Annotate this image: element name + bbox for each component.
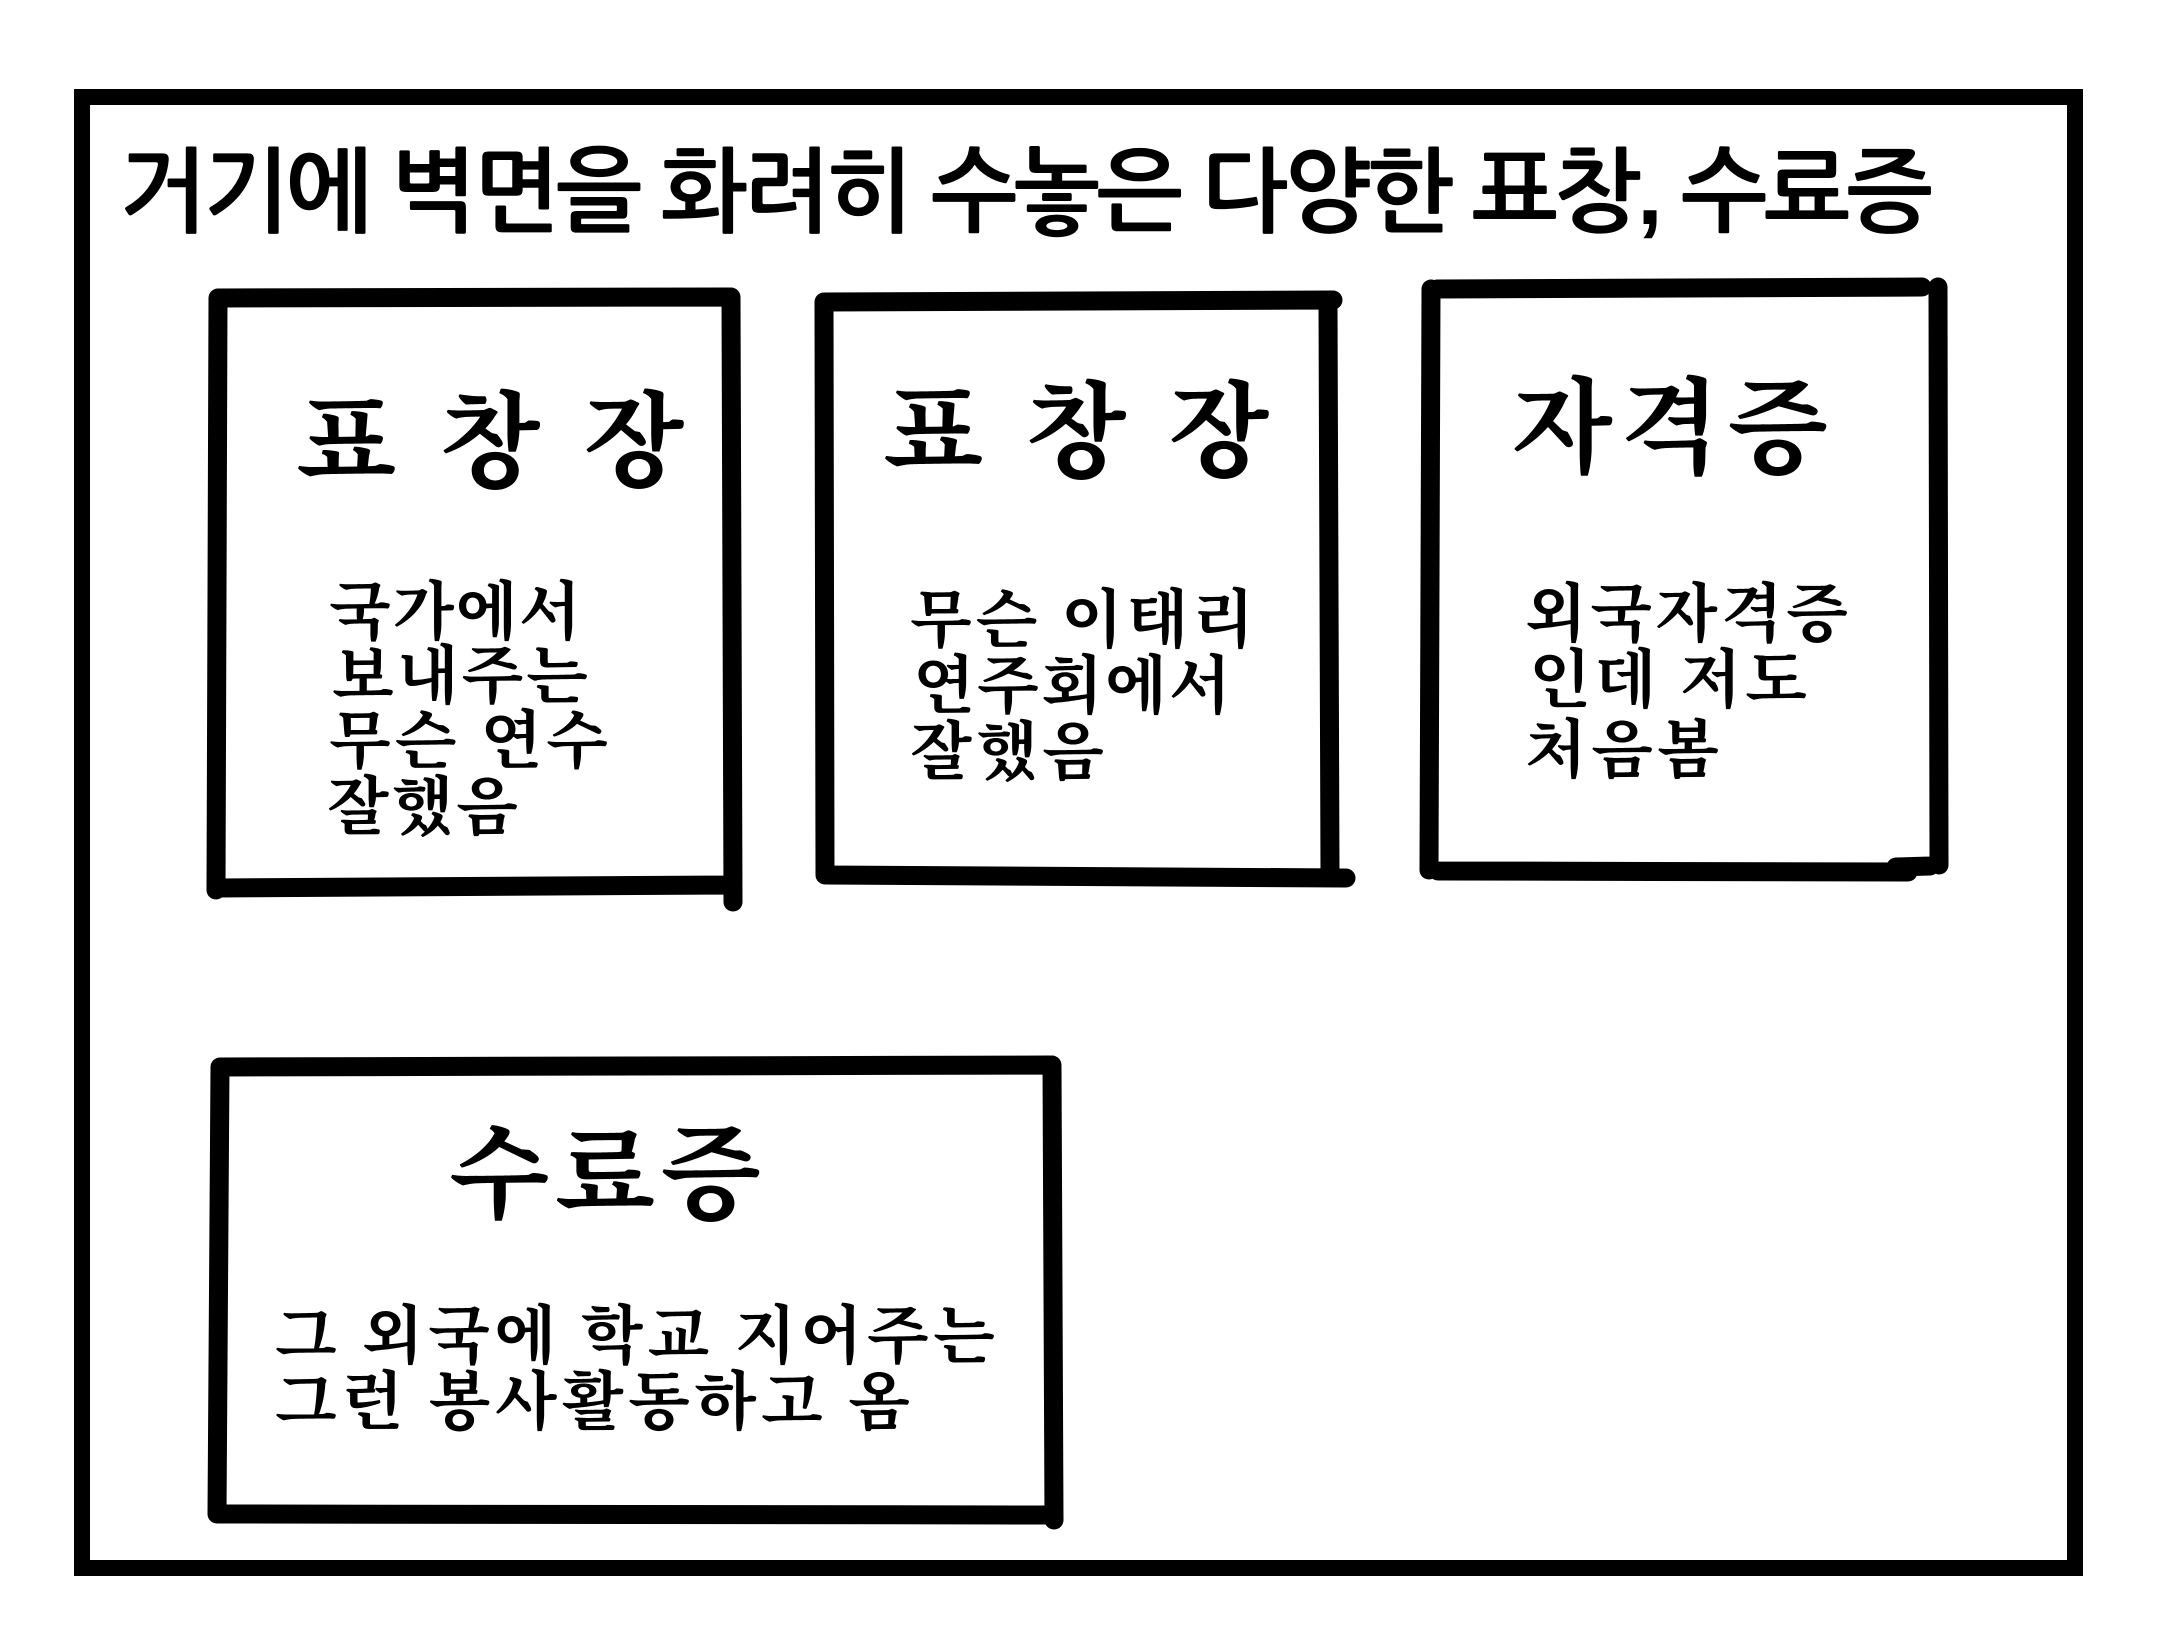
card body text [327, 577, 608, 843]
card body text: 그런 봉사활동하고 옴 [275, 1367, 910, 1438]
card heading: 표 창 장 [883, 376, 1270, 491]
title: 거기에 벽면을 화려히 수놓은 다양한 표창, 수료증 [120, 142, 1933, 244]
card body text: 국가에서 [329, 577, 581, 648]
card body text: 외국자격증 [1525, 579, 1848, 650]
card body text: 잘했음 [327, 772, 518, 843]
card: award certificate 2 [824, 300, 1346, 878]
card heading: 수료증 [449, 1118, 761, 1233]
card body text: 잘했음 [910, 717, 1104, 788]
card heading: 표 창 장 [296, 386, 685, 501]
card body text: 연주회에서 [913, 651, 1231, 722]
card: award certificate 1 [216, 297, 733, 902]
card: completion certificate [217, 1065, 1054, 1520]
card body text [275, 1301, 995, 1438]
card body text [1525, 579, 1848, 786]
card body text [910, 585, 1254, 788]
card body text: 그 외국에 학교 지어주는 [275, 1301, 995, 1372]
card body text: 무슨 연수 [329, 706, 608, 777]
card heading: 자격증 [1512, 372, 1828, 487]
card: foreign certificate [1429, 287, 1939, 872]
card body text: 처음봄 [1525, 715, 1719, 786]
card body text: 보내주는 [332, 641, 588, 712]
card body text: 인데 저도 [1529, 645, 1807, 716]
card body text: 무슨 이태리 [910, 585, 1254, 656]
